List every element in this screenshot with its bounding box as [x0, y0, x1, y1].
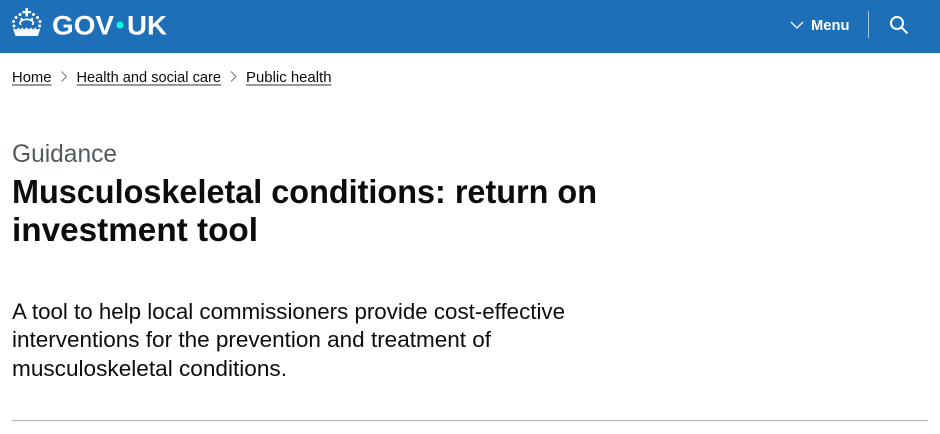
- description: A tool to help local commissioners provide cost-effective: [12, 299, 565, 324]
- breadcrumb: Public health: Public health: [246, 70, 332, 86]
- description: interventions for the prevention and treatment of: [12, 327, 492, 352]
- breadcrumb: Home: Home: [12, 70, 52, 86]
- icon: crown logo: [12, 8, 42, 36]
- logo wordmark: [52, 10, 168, 40]
- description: musculoskeletal conditions.: [12, 356, 287, 381]
- breadcrumb chevron: [62, 72, 66, 82]
- header bar: [0, 0, 940, 53]
- menu label: Menu: [811, 18, 850, 34]
- document type label: Guidance: [12, 140, 117, 168]
- icon: menu chevron: [791, 22, 803, 28]
- logo wordmark: GOV: [52, 10, 114, 40]
- title: investment tool: [12, 211, 258, 248]
- breadcrumb: Health and social care: Health and social care: [76, 70, 221, 86]
- description: [12, 299, 565, 381]
- logo wordmark: UK: [127, 10, 168, 40]
- title: [12, 173, 597, 248]
- logo dot: [116, 22, 124, 28]
- title: Musculoskeletal conditions: return on: [12, 173, 597, 210]
- breadcrumb chevron: [231, 72, 236, 82]
- menu divider: [868, 11, 869, 38]
- breadcrumb navigation: [12, 70, 332, 86]
- icon: search: [891, 17, 908, 34]
